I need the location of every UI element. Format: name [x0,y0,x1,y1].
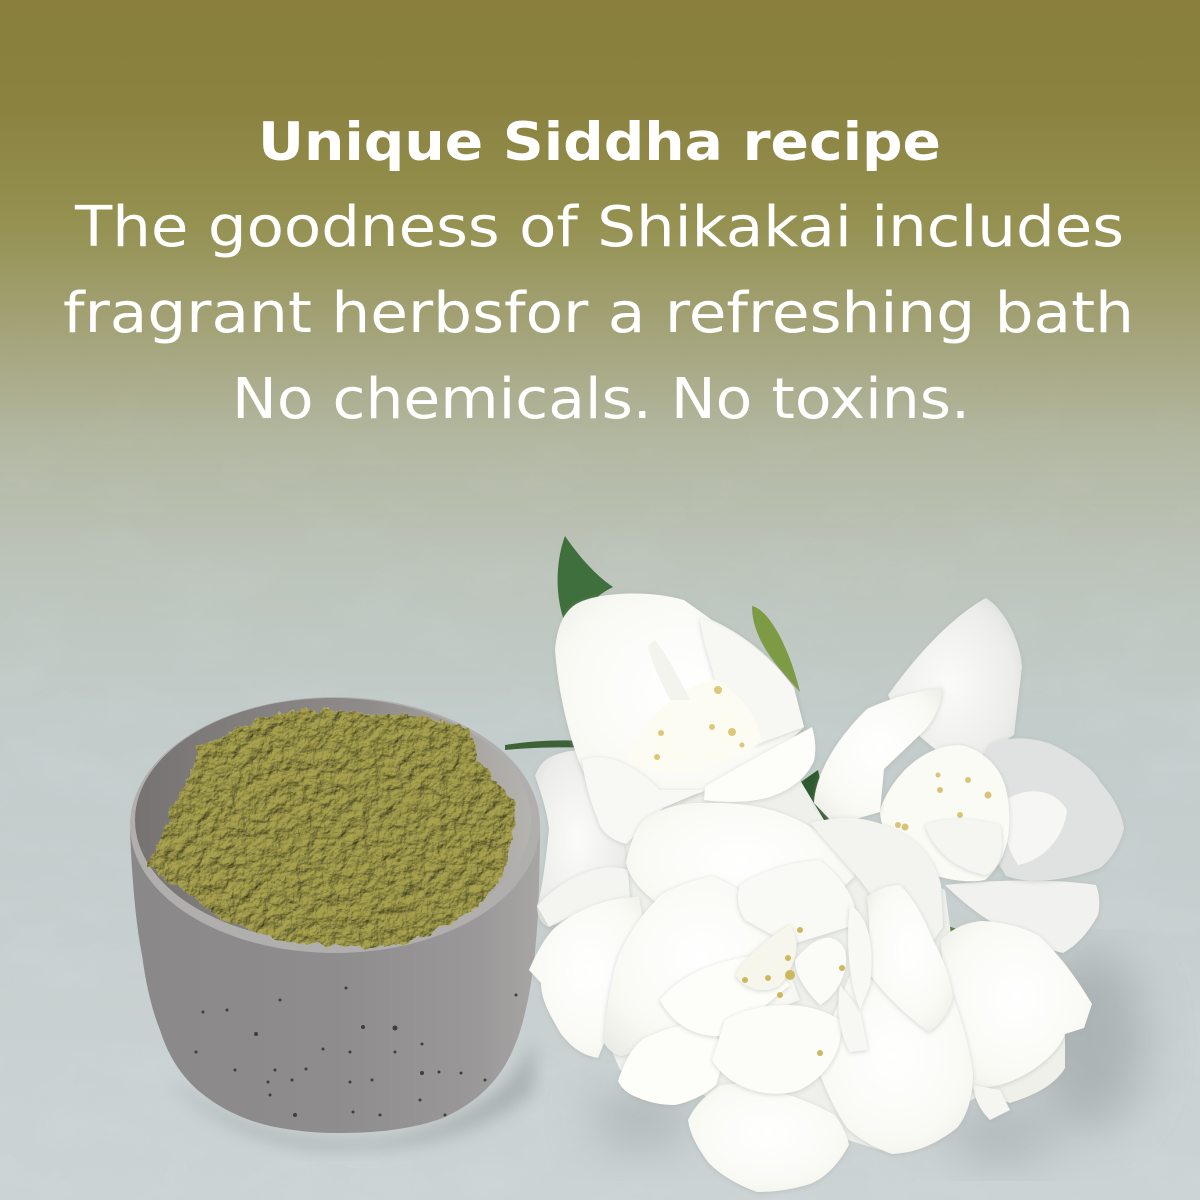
bowl inside [135,698,531,942]
flower: top [555,594,815,844]
stamens top flower [625,640,762,775]
flowers [529,594,1124,1192]
heading: Unique Siddha recipe [258,112,941,173]
text line: fragrant herbs: fragrant herbsfor a refreshing bath [63,281,1134,346]
stamens large flower [742,927,845,1056]
right top petal [810,818,943,960]
lower right big petal [815,975,973,1154]
far left petals [529,897,650,1058]
flower: lower right [941,921,1092,1120]
heading and body text [63,112,1134,432]
bottom petal [688,1084,849,1192]
right inner petal [867,885,953,1032]
centre petals [738,860,856,945]
text line: no chemicals: No chemicals. No toxins. [232,367,970,432]
bowl rim [130,697,540,953]
flower: large bottom [529,803,973,1192]
bowl of shikakai powder [130,697,540,1133]
bowl pores [194,986,518,1117]
left big petal [604,876,800,1056]
icon: green leaves and stem [505,536,966,938]
top petal [626,803,855,930]
text line: goodness of Shikakai: The goodness of Shikakai includes [74,195,1124,260]
flower base silhouette [590,780,990,1150]
soft shadows on the surface [170,950,1145,1160]
bowl body [130,830,540,1133]
flower: back left petals [535,750,630,927]
lower left petal [618,1021,724,1105]
powder mound [148,710,518,948]
flower: right [814,598,1124,953]
